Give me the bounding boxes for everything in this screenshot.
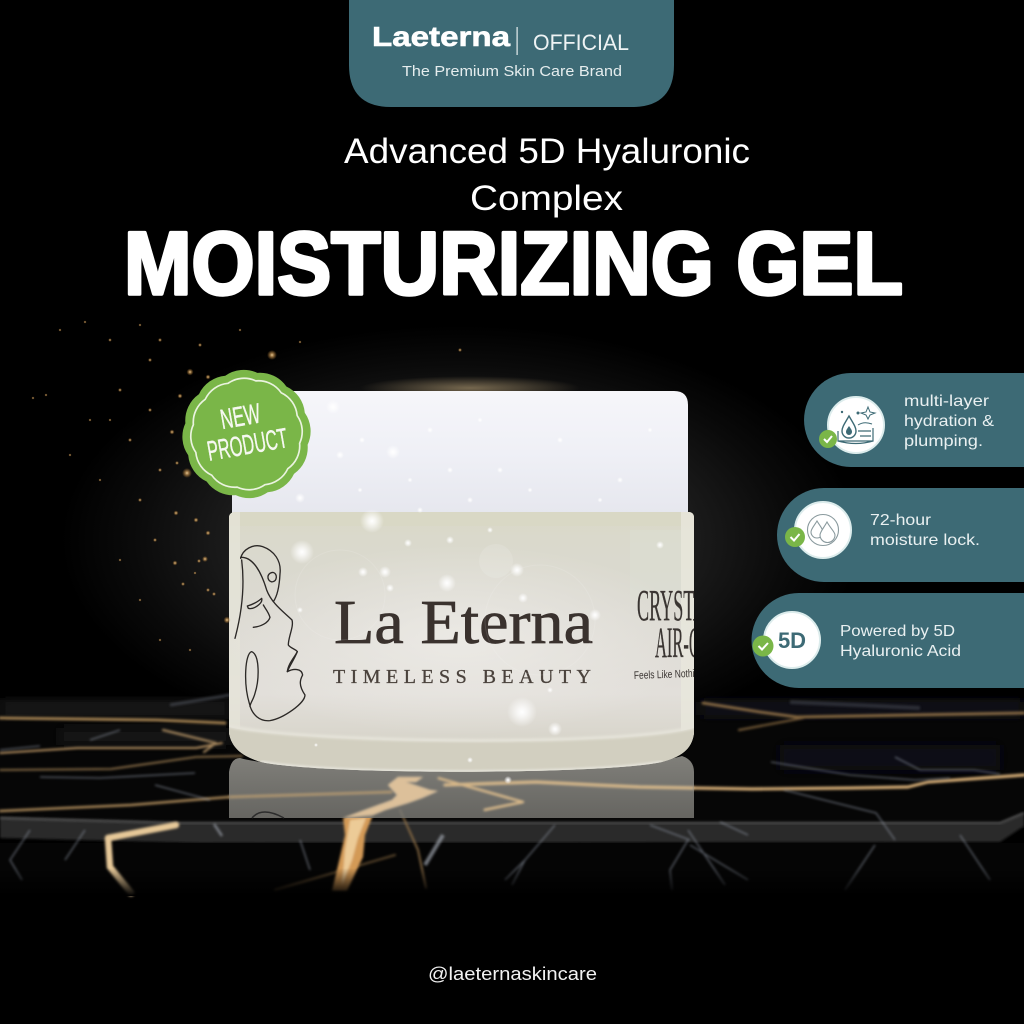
slab fade	[0, 868, 1024, 896]
feature text: multi-layer	[904, 393, 990, 410]
warm glow above lid	[360, 376, 580, 400]
feature text	[870, 512, 980, 549]
feature text	[840, 623, 961, 660]
face line art	[235, 546, 305, 721]
icon: 5D: 5D	[778, 628, 806, 653]
label text: Timeless Beauty: TIMELESS BEAUTY	[333, 666, 591, 688]
text: AIR-GEL	[655, 620, 721, 667]
brand name: Laeterna	[372, 21, 511, 52]
feature text: moisture lock.	[870, 532, 980, 549]
header tab	[349, 0, 674, 107]
feature text	[904, 393, 994, 450]
badge text: NEW	[218, 398, 263, 435]
divider	[516, 27, 518, 55]
thick gold vein	[332, 777, 438, 891]
product jar	[220, 391, 721, 780]
sparkles on jar	[290, 400, 664, 784]
main title: MOISTURIZING GEL	[124, 213, 903, 313]
feature text: hydration &	[904, 413, 994, 430]
side label text	[634, 590, 694, 679]
icon: check	[785, 527, 805, 547]
gold veins	[0, 703, 1024, 893]
icon: hydration layers	[828, 397, 884, 453]
icon: 5D	[764, 612, 820, 668]
gold particles	[32, 320, 462, 652]
background glow	[60, 325, 860, 755]
subtitle: Complex	[470, 179, 624, 218]
badge text: PRODUCT	[205, 422, 290, 467]
feature pill: 5D	[752, 593, 1024, 688]
feature text: 72-hour	[870, 512, 932, 529]
subtitle: Advanced 5D Hyaluronic	[344, 132, 750, 171]
feature text: Hyaluronic Acid	[840, 643, 961, 660]
footer handle: @laeternaskincare	[428, 964, 597, 984]
jar reflection	[229, 756, 694, 818]
feature text: Powered by 5D	[840, 623, 955, 640]
heading	[124, 132, 903, 313]
badge: new product	[173, 361, 320, 507]
badge inner outline	[183, 370, 310, 498]
tagline: The Premium Skin Care Brand	[402, 63, 622, 80]
feature text: plumping.	[904, 433, 983, 450]
badge scalloped shape	[173, 361, 320, 507]
icon: water drops	[795, 502, 851, 558]
jar lid	[232, 391, 688, 514]
feature pill: hydration	[804, 373, 1024, 467]
icon: check	[819, 430, 837, 448]
jar body	[229, 512, 694, 772]
feature pill: moisture lock	[777, 488, 1024, 582]
subtitle	[344, 132, 750, 218]
badge text	[200, 394, 290, 467]
faint lens rings	[295, 544, 595, 675]
text: CRYSTAL	[637, 581, 717, 630]
icon: check	[752, 636, 774, 656]
official label: OFFICIAL	[533, 30, 629, 55]
side label text: Feels Like Nothing	[634, 668, 704, 682]
marble slab	[0, 695, 1024, 896]
white veins	[0, 695, 1000, 890]
label text: La Eterna: La Eterna	[334, 589, 593, 657]
